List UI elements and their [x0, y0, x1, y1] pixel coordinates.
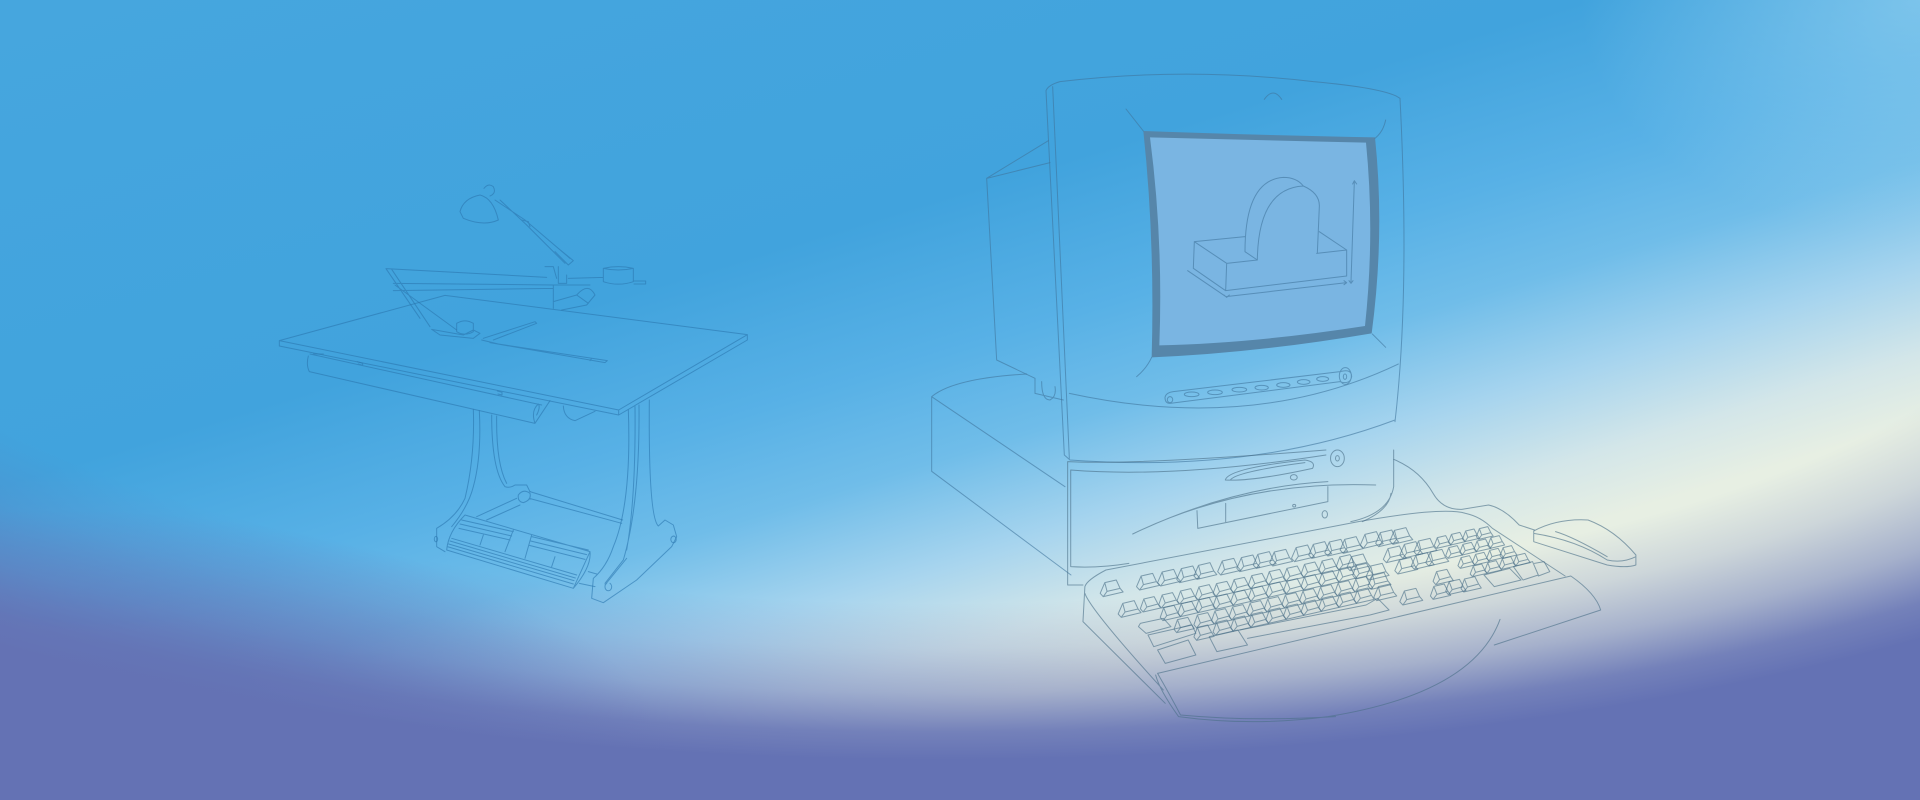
desk lamp — [460, 185, 573, 283]
keyboard keys — [1100, 527, 1550, 663]
monitor bezel — [1143, 131, 1379, 357]
mouse cable — [1394, 459, 1534, 530]
foot pedal — [447, 515, 590, 588]
monitor rear — [987, 141, 1063, 400]
computer monitor illustration — [932, 74, 1404, 575]
lamp counterweight — [568, 267, 646, 284]
monitor screen — [1150, 137, 1370, 345]
drafting arm — [386, 269, 595, 330]
table top — [279, 295, 747, 415]
drafting head and scales — [432, 321, 607, 363]
monitor control strip — [1165, 368, 1352, 403]
mouse — [1534, 520, 1636, 567]
foot rail and hinge — [434, 491, 676, 591]
monitor housing — [1046, 74, 1404, 463]
computer tower, keyboard and mouse — [1068, 450, 1636, 722]
table legs — [437, 400, 677, 603]
drafting table illustration — [279, 185, 747, 603]
desktop base box — [932, 374, 1071, 575]
paper roll under table — [307, 354, 595, 423]
CAD model on screen — [1188, 177, 1357, 297]
keyboard body and wrist rest — [1083, 511, 1601, 722]
tower lower housing — [1068, 450, 1394, 585]
floppy slot and drive — [1133, 450, 1376, 534]
